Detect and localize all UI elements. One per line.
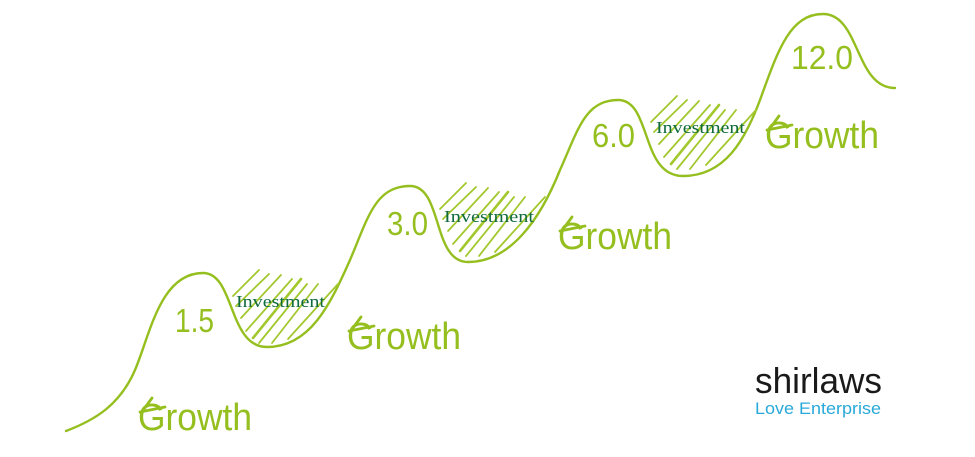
- label: Growth 2: Growth: [347, 316, 461, 358]
- label: Growth 1: Growth: [138, 397, 252, 439]
- label: Investment 3: Investment: [656, 118, 745, 137]
- logo tagline: Love Enterprise: [755, 399, 881, 418]
- hatching: investment area 3: [651, 96, 756, 169]
- value: 12.0: 12.0: [791, 39, 853, 76]
- logo wordmark: shirlaws: [755, 360, 882, 401]
- hatching: investment area 1: [233, 270, 338, 343]
- value: 3.0: 3.0: [387, 205, 428, 242]
- label: Investment 2: Investment: [444, 207, 534, 226]
- label: Investment 1: Investment: [236, 292, 325, 311]
- label: Growth 3: Growth: [558, 216, 672, 258]
- growth curve: [66, 14, 895, 431]
- value: 6.0: 6.0: [592, 117, 635, 154]
- value: 1.5: 1.5: [175, 302, 214, 339]
- logo: shirlaws: [755, 360, 882, 418]
- label: Growth 4: Growth: [765, 115, 879, 157]
- hatching: investment area 2: [440, 183, 545, 256]
